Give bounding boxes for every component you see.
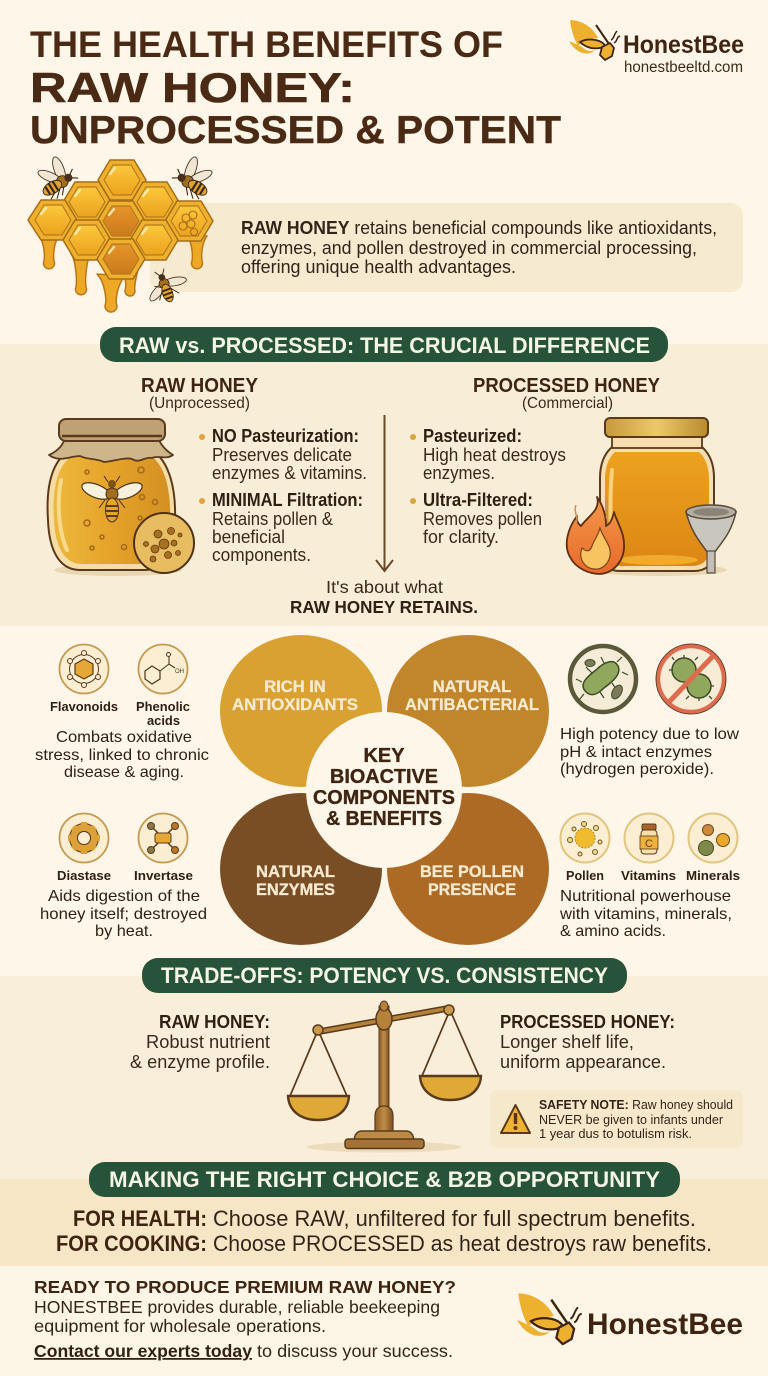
text: processed honey trade-off: uniform appearance. — [500, 1051, 666, 1072]
text: antioxidants description: stress, linked to chronic — [35, 747, 209, 764]
callout: safety note: 1 year dus to botulism risk. — [539, 1126, 692, 1141]
circle: rich in antioxidants: RICH IN — [264, 678, 326, 696]
title: RAW HONEY: — [30, 64, 355, 111]
icon: invertase — [138, 814, 188, 862]
circle: natural antibacterial — [387, 635, 549, 787]
text: call to action: READY TO PRODUCE PREMIUM RAW HONEY? — [34, 1277, 456, 1297]
heading: processed honey column — [473, 374, 660, 412]
icon: phenolic acids — [138, 644, 188, 694]
text: raw honey trade-off: Robust nutrient — [146, 1031, 270, 1052]
logo: HonestBee header — [569, 20, 744, 76]
icon: warning triangle — [501, 1105, 530, 1133]
section heading: trade-offs — [142, 958, 627, 993]
circle: natural enzymes: ENZYMES — [256, 881, 335, 899]
icon: raw honey jar with pollen disc — [48, 419, 194, 576]
text: call to action: Contact our experts today — [34, 1341, 252, 1361]
label: pollen vitamins minerals: Pollen — [566, 868, 604, 883]
label: pollen vitamins minerals: Minerals — [686, 868, 740, 883]
callout: safety note: SAFETY NOTE: Raw honey should — [539, 1097, 733, 1112]
logo: HonestBee footer: HonestBee — [587, 1308, 743, 1341]
circle: key bioactive components and benefits: BIOACTIVE — [330, 766, 438, 788]
text: recommendations: FOR COOKING: — [56, 1231, 207, 1256]
list: raw honey bullets: Retains pollen & — [212, 509, 333, 529]
list: raw honey bullets: Preserves delicate — [212, 445, 352, 465]
text: pollen description: with vitamins, minerals, — [559, 906, 732, 923]
text: recommendations — [56, 1206, 712, 1256]
text: enzymes description: Aids digestion of the — [48, 888, 200, 905]
heading: processed honey column: PROCESSED HONEY — [473, 374, 660, 397]
section heading: raw vs processed — [100, 327, 668, 362]
text: it's about what raw honey retains — [290, 577, 478, 617]
text: enzymes description: honey itself; destroyed — [40, 906, 207, 923]
list: processed honey bullets: Removes pollen — [423, 509, 542, 529]
text: call to action — [34, 1277, 456, 1361]
text: call to action: to discuss your success. — [257, 1341, 453, 1361]
list: raw honey bullets: MINIMAL Filtration: — [212, 490, 363, 510]
callout: safety note — [490, 1090, 743, 1148]
label: pollen vitamins minerals — [566, 868, 740, 883]
section heading: raw vs processed: RAW vs. PROCESSED: THE CRUCIAL DIFFERENCE — [119, 333, 650, 358]
logo: HonestBee footer — [517, 1293, 743, 1344]
heading: raw honey column — [141, 374, 258, 412]
list: raw honey bullets: enzymes & vitamins. — [212, 463, 367, 483]
label: diastase and invertase — [57, 868, 193, 883]
text: pollen description: Nutritional powerhouse — [560, 888, 731, 905]
list: raw honey bullets: NO Pasteurization: — [212, 426, 359, 446]
heading: raw honey column: RAW HONEY — [141, 374, 258, 397]
icon: honeycomb with drips and bees — [28, 151, 220, 312]
panel: intro: enzymes, and pollen destroyed in commercial processing, — [241, 238, 697, 258]
icon: bacteria prohibited — [656, 644, 726, 714]
icon: flavonoids — [60, 644, 108, 694]
icon: vitamins: C — [645, 838, 653, 850]
arrow: divider pointing down — [376, 415, 393, 571]
text: raw honey trade-off: & enzyme profile. — [130, 1051, 270, 1072]
icon: diastase — [60, 814, 108, 862]
list: processed honey bullets — [410, 426, 566, 547]
list: processed honey bullets: enzymes. — [423, 463, 495, 483]
list: raw honey bullets: beneficial — [212, 527, 285, 547]
text: enzymes description — [40, 888, 207, 940]
panel: intro: RAW HONEY retains beneficial compounds like antioxidants, — [241, 218, 717, 238]
heading: raw honey column: (Unprocessed) — [149, 395, 250, 412]
circle: natural enzymes: NATURAL — [256, 863, 335, 881]
list: processed honey bullets: Pasteurized: — [423, 426, 522, 446]
icon: pollen — [560, 814, 610, 862]
text: recommendations: FOR HEALTH: — [73, 1206, 207, 1231]
text: it's about what raw honey retains: RAW HONEY RETAINS. — [290, 597, 478, 617]
circle: bee pollen presence — [387, 793, 549, 945]
icon: balance scale — [288, 1001, 481, 1152]
label: diastase and invertase: Diastase — [57, 868, 111, 883]
list: raw honey bullets: components. — [212, 545, 311, 565]
text: processed honey trade-off: Longer shelf life, — [500, 1031, 634, 1052]
text: raw honey trade-off — [130, 1011, 270, 1072]
icon: minerals — [688, 814, 738, 862]
text: recommendations: Choose RAW, unfiltered for full spectrum benefits. — [213, 1206, 696, 1231]
label: flavonoids and phenolic acids: Phenolic — [136, 699, 190, 714]
circle: bee pollen presence: BEE POLLEN — [420, 863, 524, 881]
section heading: making the right choice: MAKING THE RIGHT CHOICE & B2B OPPORTUNITY — [109, 1167, 660, 1192]
list: processed honey bullets: for clarity. — [423, 527, 499, 547]
icon: phenolic acids: OH — [175, 669, 184, 675]
circle: bee pollen presence: PRESENCE — [428, 881, 516, 899]
text: antibacterial description — [560, 726, 739, 778]
circle: rich in antioxidants — [220, 635, 382, 787]
title — [30, 23, 561, 152]
text: pollen description — [559, 888, 732, 940]
band: making the right choice background — [0, 1179, 768, 1266]
text: call to action: HONESTBEE provides durable, reliable beekeeping — [34, 1297, 440, 1317]
label: flavonoids and phenolic acids: acids — [147, 713, 180, 728]
panel: intro — [150, 203, 743, 292]
circle: rich in antioxidants: ANTIOXIDANTS — [232, 696, 358, 714]
band: raw vs processed background — [0, 344, 768, 626]
band: trade-offs background — [0, 976, 768, 1179]
circle: natural antibacterial: ANTIBACTERIAL — [405, 696, 539, 714]
circle: key bioactive components and benefits: KEY — [363, 745, 405, 767]
label: flavonoids and phenolic acids: Flavonoids — [50, 699, 118, 714]
circle: key bioactive components and benefits: & BENEFITS — [326, 808, 442, 830]
text: call to action: equipment for wholesale operations. — [34, 1316, 326, 1336]
logo: HonestBee header: HonestBee — [623, 31, 744, 59]
text: antibacterial description: pH & intact enzymes — [560, 744, 712, 761]
section heading: trade-offs: TRADE-OFFS: POTENCY VS. CONSISTENCY — [161, 963, 608, 988]
text: processed honey trade-off — [500, 1011, 675, 1072]
title: THE HEALTH BENEFITS OF — [30, 23, 503, 65]
label: flavonoids and phenolic acids — [50, 699, 190, 728]
text: antioxidants description — [35, 729, 209, 781]
list: processed honey bullets: Ultra-Filtered: — [423, 490, 533, 510]
icon: vitamins — [624, 814, 674, 862]
logo: HonestBee header: honestbeeltd.com — [624, 59, 743, 76]
circle: key bioactive components and benefits: COMPONENTS — [313, 787, 455, 809]
panel: intro: offering unique health advantages. — [241, 257, 516, 277]
circle: key bioactive components and benefits — [306, 712, 462, 868]
text: recommendations: Choose PROCESSED as heat destroys raw benefits. — [213, 1231, 712, 1256]
text: processed honey trade-off: PROCESSED HONEY: — [500, 1011, 675, 1032]
text: raw honey trade-off: RAW HONEY: — [159, 1011, 270, 1032]
title: UNPROCESSED & POTENT — [30, 109, 561, 152]
chart: four benefit circles — [220, 635, 549, 945]
text: it's about what raw honey retains: It's about what — [326, 577, 443, 597]
circle: natural enzymes — [220, 793, 382, 945]
list: raw honey bullets — [199, 426, 367, 565]
callout: safety note: NEVER be given to infants under — [539, 1112, 724, 1127]
text: enzymes description: by heat. — [95, 923, 153, 940]
text: antioxidants description: disease & aging. — [64, 764, 184, 781]
label: diastase and invertase: Invertase — [134, 868, 193, 883]
label: pollen vitamins minerals: Vitamins — [621, 868, 676, 883]
band: call to action background — [0, 1266, 768, 1376]
icon: bacteria — [570, 646, 636, 712]
icon: processed honey jar with flame and strainer — [567, 418, 736, 576]
circle: natural antibacterial: NATURAL — [433, 678, 511, 696]
heading: processed honey column: (Commercial) — [522, 395, 613, 412]
section heading: making the right choice — [89, 1162, 680, 1197]
text: pollen description: & amino acids. — [560, 923, 666, 940]
text: antibacterial description: (hydrogen peroxide). — [560, 761, 714, 778]
list: processed honey bullets: High heat destroys — [423, 445, 566, 465]
text: antioxidants description: Combats oxidative — [56, 729, 192, 746]
text: antibacterial description: High potency due to low — [560, 726, 739, 743]
